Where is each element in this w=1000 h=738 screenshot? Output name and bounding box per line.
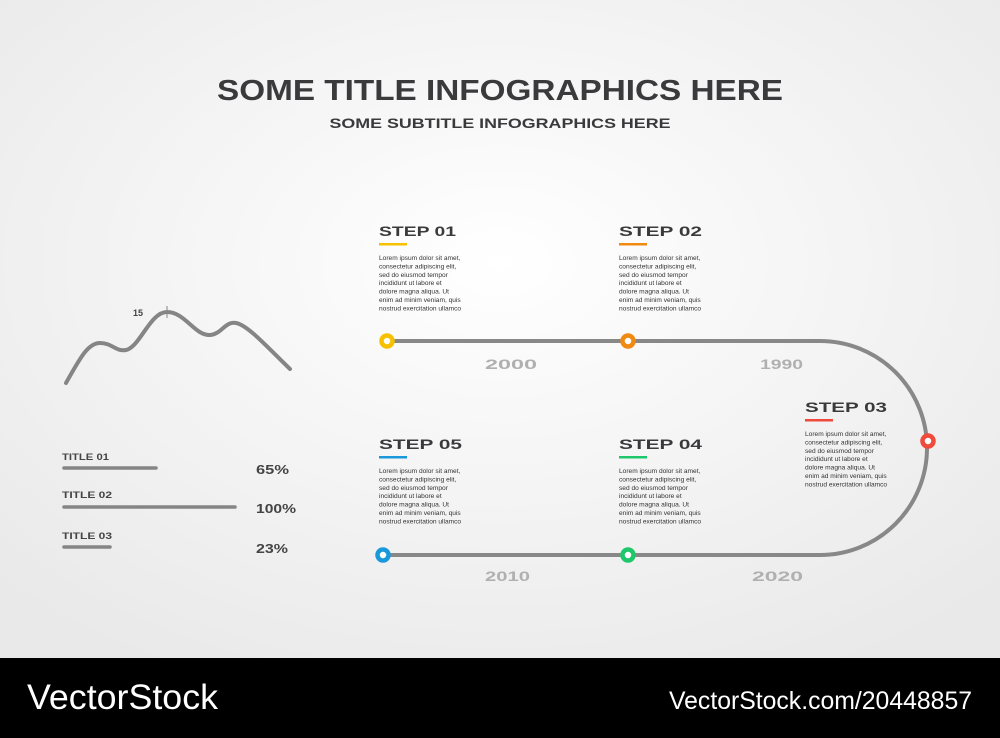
step 02 bbox=[619, 223, 702, 312]
progress bars: TITLE 02 bbox=[62, 490, 112, 501]
step 04: incididunt ut labore et bbox=[619, 493, 682, 500]
step 03: Lorem ipsum dolor sit amet, bbox=[805, 431, 887, 438]
step 01: nostrud exercitation ullamco bbox=[379, 305, 461, 312]
step 04: sed do eiusmod tempor bbox=[619, 485, 689, 492]
step 03: sed do eiusmod tempor bbox=[805, 448, 875, 455]
step 01 bbox=[379, 223, 461, 312]
years: 1990 bbox=[760, 356, 803, 372]
line chart bbox=[66, 306, 290, 383]
step 05: nostrud exercitation ullamco bbox=[379, 518, 461, 525]
step 05: incididunt ut labore et bbox=[379, 493, 442, 500]
step 01: enim ad minim veniam, quis bbox=[379, 297, 461, 304]
progress bars: 65% bbox=[256, 463, 289, 477]
step 03 bbox=[805, 399, 887, 488]
progress bars: 23% bbox=[256, 542, 288, 556]
step 03: STEP 03 bbox=[805, 399, 887, 415]
step 03: incididunt ut labore et bbox=[805, 456, 868, 463]
step 04: nostrud exercitation ullamco bbox=[619, 518, 701, 525]
step 04: STEP 04 bbox=[619, 436, 702, 452]
dots bbox=[378, 336, 934, 560]
step 05: Lorem ipsum dolor sit amet, bbox=[379, 468, 461, 475]
line chart: 15 bbox=[133, 308, 143, 318]
step 03: dolore magna aliqua. Ut bbox=[805, 465, 875, 472]
step 02: enim ad minim veniam, quis bbox=[619, 297, 701, 304]
step 02: nostrud exercitation ullamco bbox=[619, 305, 701, 312]
step 02: Lorem ipsum dolor sit amet, bbox=[619, 255, 701, 262]
footer band: VectorStock.com/20448857 bbox=[669, 687, 972, 715]
step 03: consectetur adipiscing elit, bbox=[805, 439, 883, 446]
progress bars: 100% bbox=[256, 502, 296, 516]
step 01: dolore magna aliqua. Ut bbox=[379, 289, 449, 296]
years: 2010 bbox=[485, 568, 530, 584]
step 03: enim ad minim veniam, quis bbox=[805, 473, 887, 480]
step 02: STEP 02 bbox=[619, 223, 702, 239]
footer band: VectorStock bbox=[27, 678, 219, 717]
step 04: dolore magna aliqua. Ut bbox=[619, 502, 689, 509]
step 04 bbox=[619, 436, 702, 525]
step 02: dolore magna aliqua. Ut bbox=[619, 289, 689, 296]
years: 2020 bbox=[752, 568, 803, 584]
timeline path bbox=[383, 341, 927, 555]
step 01: consectetur adipiscing elit, bbox=[379, 263, 457, 270]
step 05: sed do eiusmod tempor bbox=[379, 485, 449, 492]
step 01: incididunt ut labore et bbox=[379, 280, 442, 287]
step 03: nostrud exercitation ullamco bbox=[805, 481, 887, 488]
step 02: incididunt ut labore et bbox=[619, 280, 682, 287]
step 05: dolore magna aliqua. Ut bbox=[379, 502, 449, 509]
step 01: STEP 01 bbox=[379, 223, 456, 239]
step 01: Lorem ipsum dolor sit amet, bbox=[379, 255, 461, 262]
step 04: Lorem ipsum dolor sit amet, bbox=[619, 468, 701, 475]
step 05: consectetur adipiscing elit, bbox=[379, 476, 457, 483]
step 02: sed do eiusmod tempor bbox=[619, 272, 689, 279]
years: 2000 bbox=[485, 356, 537, 372]
progress bars: TITLE 01 bbox=[62, 452, 110, 463]
step 05 bbox=[379, 436, 462, 525]
step 05: STEP 05 bbox=[379, 436, 462, 452]
progress bars bbox=[62, 452, 296, 556]
step 05: enim ad minim veniam, quis bbox=[379, 510, 461, 517]
footer band bbox=[0, 658, 1000, 738]
step 01: sed do eiusmod tempor bbox=[379, 272, 449, 279]
step 02: consectetur adipiscing elit, bbox=[619, 263, 697, 270]
subtitle: SOME SUBTITLE INFOGRAPHICS HERE bbox=[330, 115, 670, 131]
step 04: enim ad minim veniam, quis bbox=[619, 510, 701, 517]
title: SOME TITLE INFOGRAPHICS HERE bbox=[217, 75, 783, 107]
progress bars: TITLE 03 bbox=[62, 531, 112, 542]
years bbox=[485, 356, 803, 584]
step 04: consectetur adipiscing elit, bbox=[619, 476, 697, 483]
